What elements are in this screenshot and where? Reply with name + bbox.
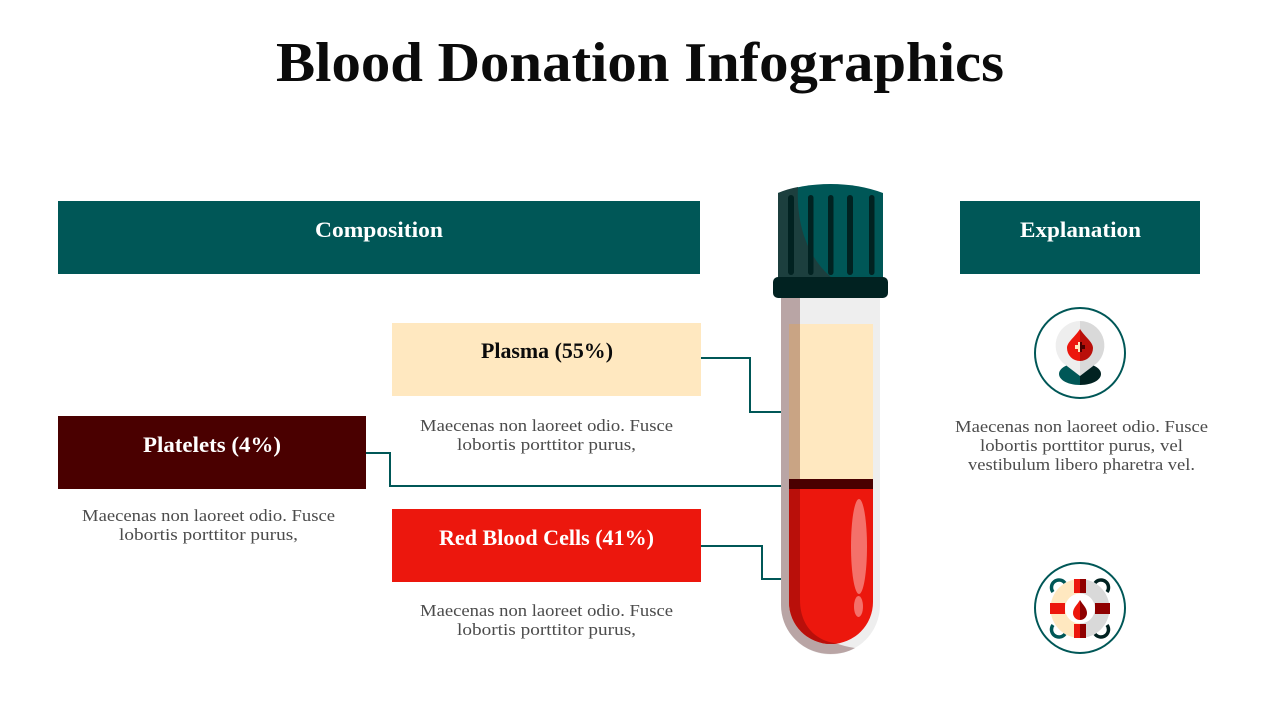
panel: plasma: lobortis porttitor purus, [457, 435, 636, 454]
panel: red blood cells: lobortis porttitor purus, [457, 620, 636, 639]
text: explanation description: vestibulum libero pharetra vel. [968, 455, 1195, 474]
red blood cells layer [789, 489, 873, 644]
panel: plasma: Maecenas non laoreet odio. Fusce [420, 416, 673, 435]
panel: platelets: Maecenas non laoreet odio. Fusce [82, 506, 335, 525]
panel: plasma: Plasma (55%) [481, 338, 613, 363]
text: explanation description [955, 417, 1208, 474]
illustration: test tube [773, 184, 888, 654]
panel: red blood cells: Red Blood Cells (41%) [439, 525, 654, 550]
text: explanation description: Maecenas non laoreet odio. Fusce [955, 417, 1208, 436]
panel: explanation header [960, 201, 1200, 274]
connector: platelets to tube [366, 453, 781, 486]
panel: composition header [58, 201, 700, 274]
panel: explanation header: Explanation [1020, 217, 1141, 242]
tube cap [773, 184, 888, 298]
connector: plasma to tube [701, 358, 781, 412]
panel: platelets [58, 416, 366, 544]
panel: plasma [392, 323, 701, 454]
panel: red blood cells: Maecenas non laoreet odio. Fusce [420, 601, 673, 620]
plasma layer [789, 324, 873, 479]
icon: blood location pin [1035, 308, 1125, 398]
panel: red blood cells [392, 509, 701, 639]
panel: platelets: lobortis porttitor purus, [119, 525, 298, 544]
platelets layer [789, 479, 873, 489]
panel: composition header: Composition [315, 217, 443, 242]
title: Blood Donation Infographics [276, 32, 1004, 94]
tube glass [781, 296, 880, 654]
panel: platelets: Platelets (4%) [143, 432, 281, 457]
icon: lifebuoy with blood drop [1035, 563, 1125, 653]
connector: red blood cells to tube [701, 546, 781, 579]
text: explanation description: lobortis porttitor purus, vel [980, 436, 1183, 455]
